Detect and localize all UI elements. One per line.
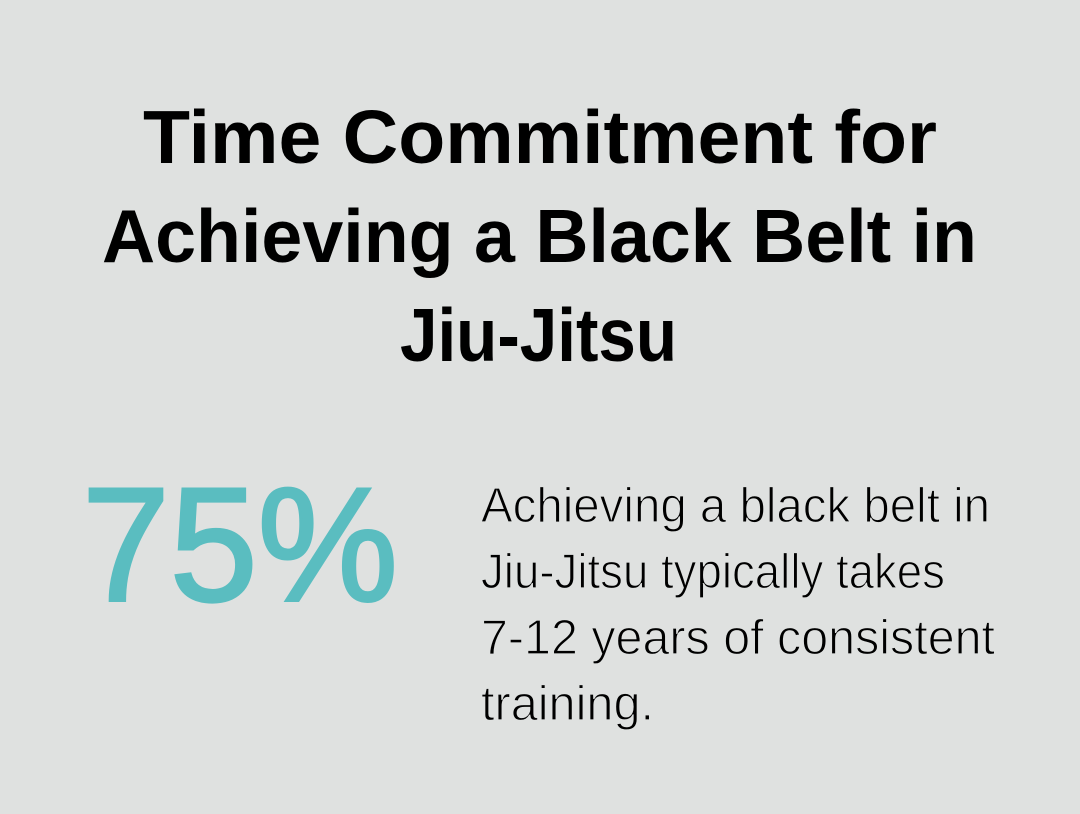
statistic: 75%: 75% — [82, 454, 398, 636]
description text: 7-12 years of consistent — [481, 610, 995, 665]
description text: Jiu-Jitsu typically takes — [481, 544, 945, 599]
description text: training. — [481, 676, 654, 731]
description text — [481, 478, 995, 731]
title: Time Commitment for — [143, 95, 937, 179]
title: Achieving a Black Belt in — [102, 194, 977, 278]
description text: Achieving a black belt in — [481, 478, 990, 533]
title — [102, 95, 977, 377]
title: Jiu-Jitsu — [400, 293, 677, 377]
